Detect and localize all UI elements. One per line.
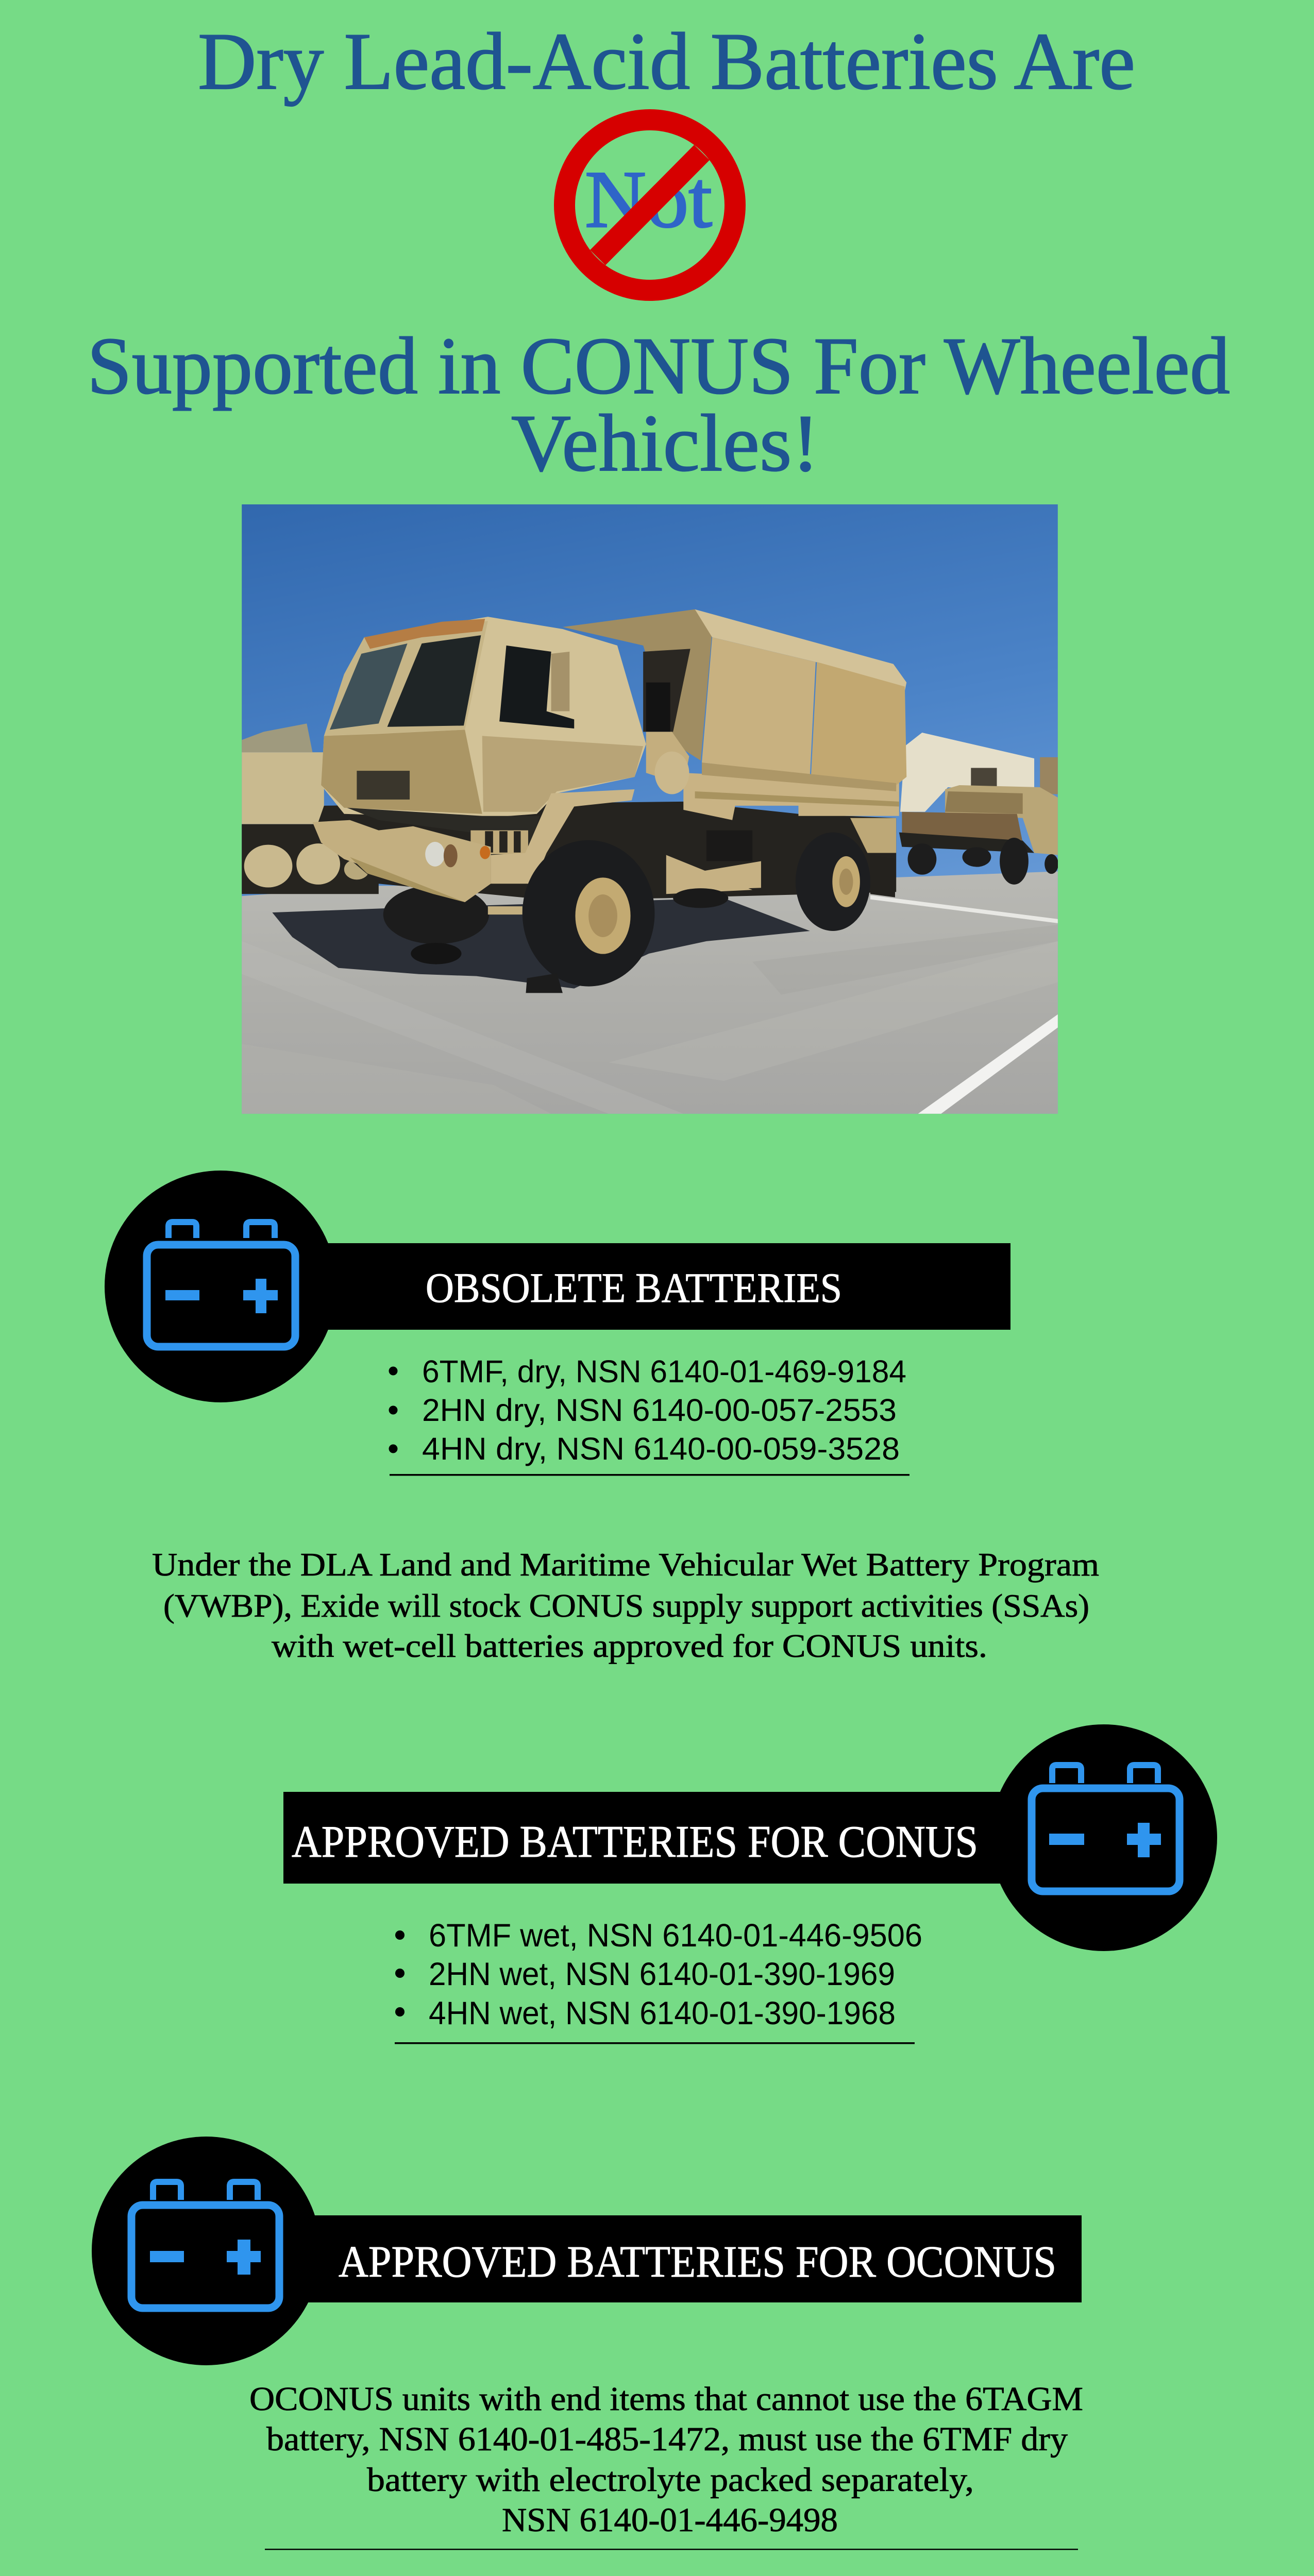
chassis: [315, 802, 896, 900]
icon: battery: [92, 2137, 321, 2365]
heading bar: APPROVED BATTERIES FOR OCONUS: [339, 2236, 1056, 2286]
text block: VWBP program: (VWBP), Exide will stock CONUS supply support activities (SSAs): [163, 1588, 1089, 1624]
title: Supported in CONUS For Wheeled: [87, 321, 1230, 411]
section: approved batteries for OCONUS: [92, 2137, 1083, 2550]
text block: battery with electrolyte packed separately,: [367, 2461, 974, 2499]
title: [87, 16, 1230, 488]
icon: battery: [105, 1171, 336, 1402]
text block: NSN 6140-01-446-9498: [502, 2501, 838, 2539]
bullet list: 4HN dry, NSN 6140-00-059-3528: [422, 1431, 900, 1466]
text block: VWBP program: [152, 1547, 1099, 1664]
bullet list: [395, 1918, 922, 2031]
icon: prohibition sign over the word Not: Not: [585, 155, 712, 245]
distant humvee: [945, 785, 1058, 855]
title: Dry Lead-Acid Batteries Are: [198, 16, 1135, 107]
bullet list: 2HN dry, NSN 6140-00-057-2553: [422, 1393, 897, 1428]
heading bar: OBSOLETE BATTERIES: [426, 1264, 842, 1311]
bumper: [312, 820, 491, 902]
front wheel: [523, 840, 654, 987]
heading bar: APPROVED BATTERIES FOR CONUS: [292, 1817, 978, 1867]
photo: military truck in parking lot: [242, 504, 1058, 1114]
left tracked vehicle: [242, 723, 312, 752]
title: Vehicles!: [511, 398, 819, 488]
heading bar: [283, 1792, 1104, 1884]
section: obsolete batteries: [105, 1171, 1010, 1476]
text block: battery, NSN 6140-01-485-1472, must use the 6TMF dry: [266, 2420, 1068, 2458]
bullet list: 4HN wet, NSN 6140-01-390-1968: [429, 1995, 896, 2031]
far left wheel: [383, 885, 489, 944]
heading bar: [221, 1243, 1010, 1330]
tarp: [563, 609, 712, 760]
text block: [249, 2380, 1083, 2539]
bullet list: 2HN wet, NSN 6140-01-390-1969: [429, 1956, 895, 1992]
text block: OCONUS units with end items that cannot use the 6TAGM: [249, 2380, 1083, 2418]
rear wheel: [796, 833, 870, 931]
bullet list: 6TMF wet, NSN 6140-01-446-9506: [429, 1918, 922, 1954]
bullet list: [389, 1354, 906, 1466]
text block: VWBP program: with wet-cell batteries approved for CONUS units.: [272, 1628, 987, 1664]
cargo bed: [683, 773, 899, 820]
building: [900, 733, 1034, 812]
section: approved batteries for CONUS: [283, 1724, 1217, 2044]
icon: prohibition sign over the word Not: [565, 120, 735, 291]
bullet list: 6TMF, dry, NSN 6140-01-469-9184: [422, 1354, 906, 1389]
icon: battery: [990, 1724, 1217, 1951]
heading bar: [206, 2215, 1082, 2302]
text block: VWBP program: Under the DLA Land and Maritime Vehicular Wet Battery Program: [152, 1547, 1099, 1583]
cab: [321, 617, 646, 818]
shadow: [272, 898, 810, 989]
